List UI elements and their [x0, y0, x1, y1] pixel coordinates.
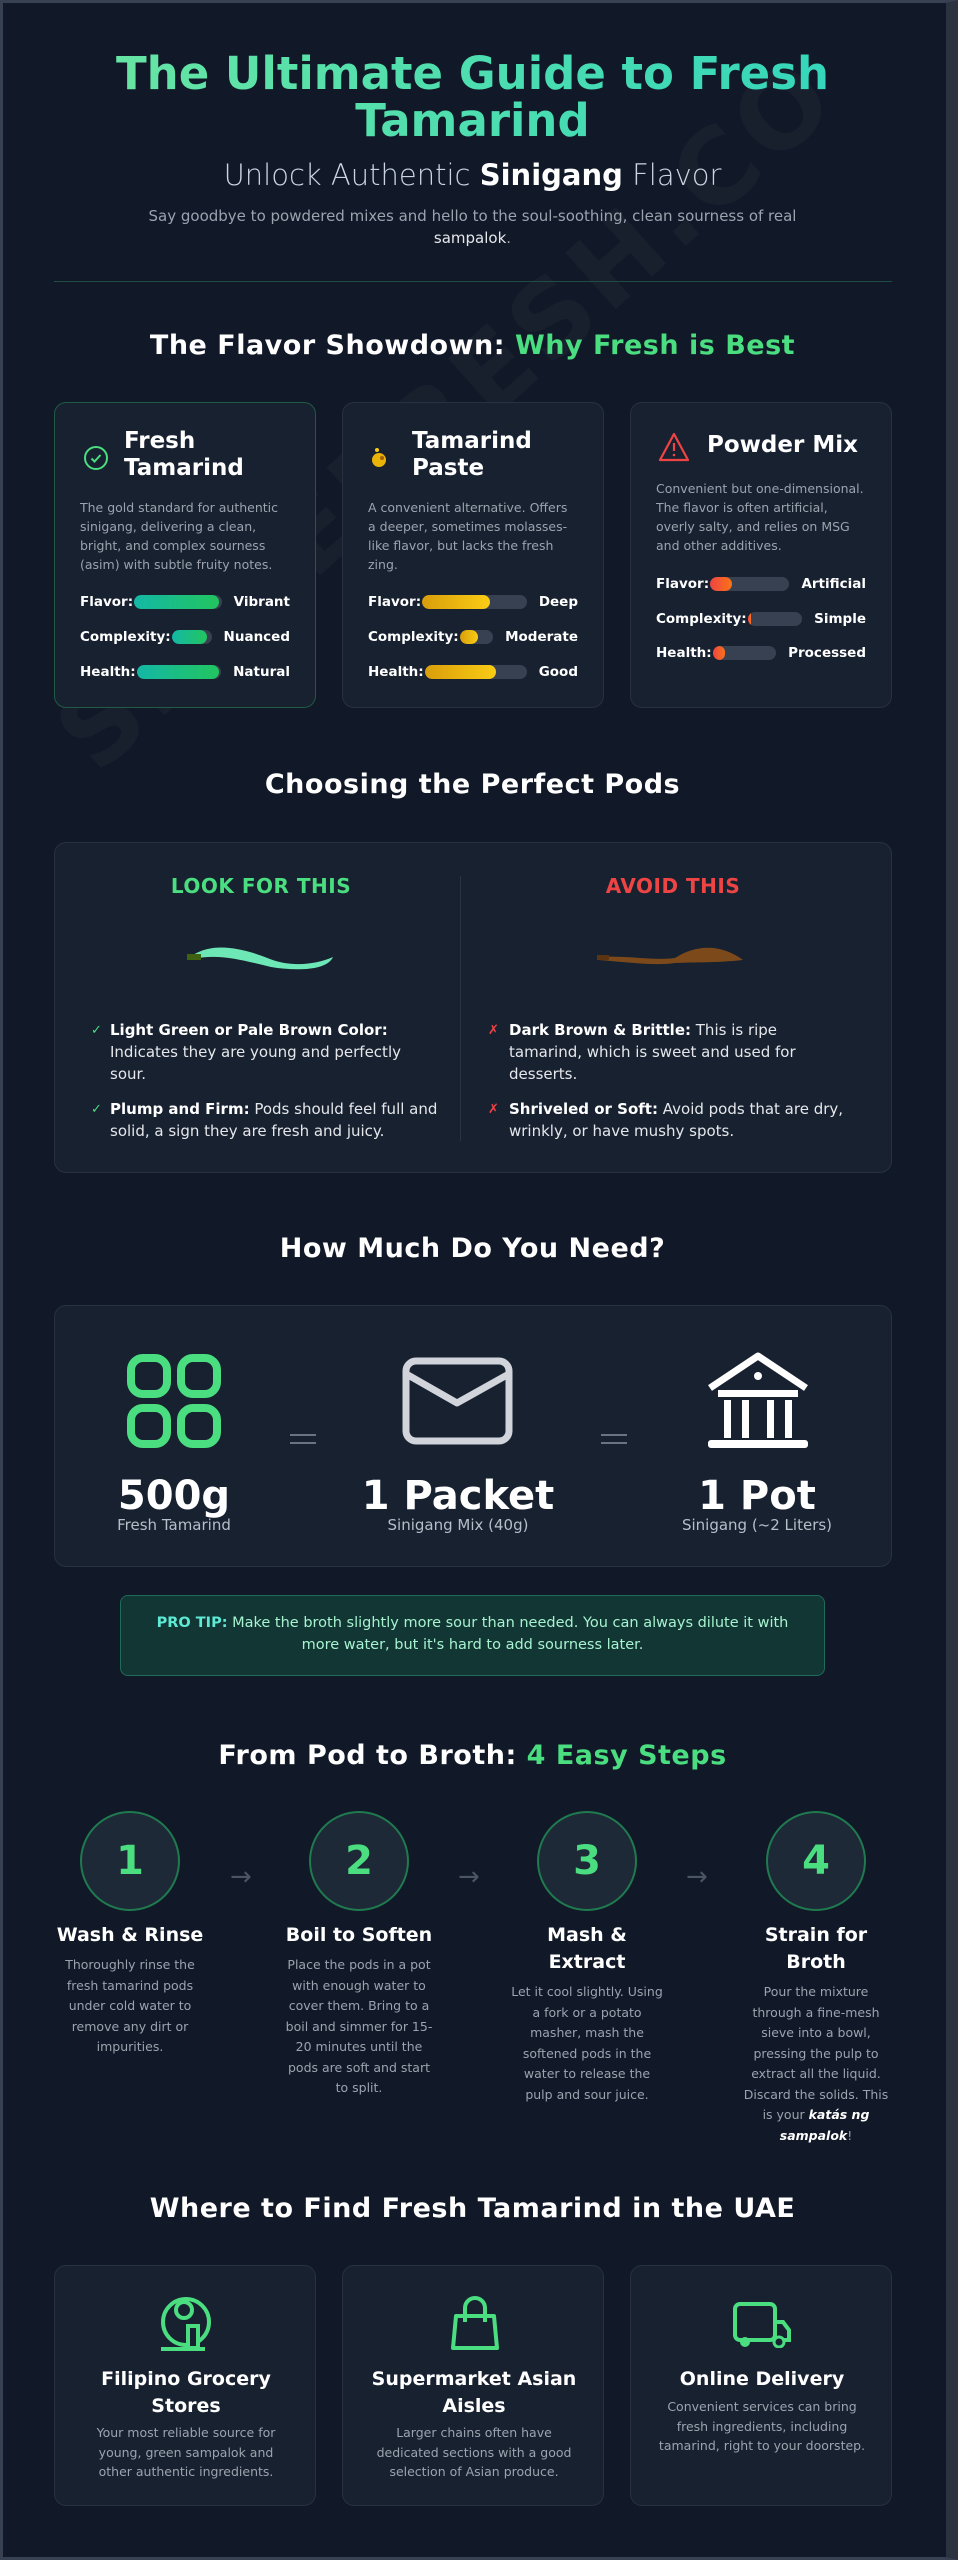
card title	[372, 2368, 576, 2417]
step 4: 4	[802, 1838, 830, 1884]
card: tamarind paste: Health: Good	[368, 664, 578, 680]
callout: pro tip: PRO TIP: Make the broth slightly more sour than needed. You can always dilute it with more water, but it's hard to add sourness later.	[157, 1615, 788, 1653]
panel: pods: Shriveled or Soft: Avoid pods that are dry, wrinkly, or have mushy spots.	[509, 1100, 843, 1140]
card: online delivery	[630, 2265, 892, 2506]
panel: pods: Plump and Firm: Pods should feel full and solid, a sign they are fresh and juicy.	[110, 1100, 437, 1140]
quantity: packet	[362, 1473, 554, 1534]
list: look for	[91, 1021, 437, 1140]
panel: quantities: 500g	[118, 1473, 230, 1519]
icon: bag	[451, 2296, 499, 2350]
card title	[124, 428, 244, 481]
panel: pods: ✓	[91, 1102, 102, 1117]
step 4: Broth	[786, 1951, 846, 1973]
icon: paste	[372, 448, 386, 467]
title	[0, 50, 945, 144]
arrow: →	[458, 1862, 480, 1892]
icon: check circle	[84, 446, 108, 470]
card: powder mix: Health: Processed	[656, 645, 866, 661]
bars: Flavor: Deep	[368, 594, 578, 610]
panel: quantities: Sinigang (~2 Liters)	[682, 1516, 832, 1534]
panel: pods: ✗	[488, 1023, 499, 1038]
icon: green pod	[187, 948, 333, 970]
step 2: 2	[345, 1838, 373, 1884]
panel: pods	[54, 842, 892, 1173]
card: fresh tamarind	[54, 402, 316, 708]
card title: Tamarind	[412, 428, 532, 454]
heading: flavor showdown: The Flavor Showdown: Why Fresh is Best	[150, 330, 795, 361]
arrow: →	[686, 1862, 708, 1892]
card desc: Larger chains often have dedicated sections with a good selection of Asian produce.	[377, 2425, 571, 2479]
panel: pods: Light Green or Pale Brown Color: Indicates they are young and perfectly sour.	[110, 1021, 401, 1083]
tagline: Say goodbye to powdered mixes and hello to the soul-soothing, clean sourness of real sampalok.	[149, 207, 796, 247]
panel: quantities	[54, 1305, 892, 1567]
card desc: The gold standard for authentic sinigang, delivering a clean, bright, and complex sourness (asim) with subtle fruity notes.	[80, 500, 278, 572]
step 3: 3	[573, 1838, 601, 1884]
panel: quantities: 1 Packet	[362, 1473, 554, 1519]
card: tamarind paste: Complexity: Moderate	[368, 629, 578, 645]
panel: pods: ✓	[91, 1023, 102, 1038]
step 2	[286, 1811, 432, 2095]
card: supermarket	[342, 2265, 604, 2506]
step 4: Strain for	[765, 1924, 867, 1946]
step 3	[511, 1811, 663, 2102]
panel: pods: Dark Brown & Brittle: This is ripe tamarind, which is sweet and used for desserts.	[509, 1021, 796, 1083]
heading: steps: From Pod to Broth: 4 Easy Steps	[218, 1740, 727, 1771]
list: avoid	[488, 1021, 843, 1140]
callout: pro tip	[120, 1595, 825, 1676]
subtitle: Unlock Authentic Sinigang Flavor	[224, 158, 721, 192]
icon: warning	[658, 432, 690, 462]
arrow: →	[230, 1862, 252, 1892]
bars: Flavor: Vibrant	[80, 594, 290, 610]
icon: store	[161, 2297, 211, 2351]
card: powder mix: Complexity: Simple	[656, 611, 866, 627]
icon: pot building	[708, 1352, 808, 1448]
step 1: 1	[116, 1838, 144, 1884]
card: fresh tamarind: Complexity: Nuanced	[80, 629, 290, 645]
quantity: 500g	[117, 1473, 231, 1534]
panel: pods: ✗	[488, 1102, 499, 1117]
card title: Tamarind	[124, 455, 244, 481]
card desc: A convenient alternative. Offers a deeper, sometimes molasses-like flavor, but lacks the fresh zing.	[368, 500, 567, 572]
text: Let it cool slightly. Using a fork or a potato masher, mash the softened pods in the water to release the pulp and sour juice.	[511, 1984, 663, 2102]
step 4	[744, 1811, 888, 2142]
heading: how much: How Much Do You Need?	[280, 1233, 665, 1264]
card: fresh tamarind: Health: Natural	[80, 664, 290, 680]
panel: quantities: Fresh Tamarind	[117, 1516, 231, 1534]
card title: Supermarket Asian	[372, 2368, 576, 2390]
card title: Aisles	[442, 2395, 506, 2417]
card desc: Convenient but one-dimensional. The flavor is often artificial, overly salty, and relies on MSG and other additives.	[656, 481, 864, 553]
card: tamarind paste	[342, 402, 604, 708]
card title: Fresh	[124, 428, 195, 454]
icon: brown pod	[597, 948, 743, 964]
title: Tamarind	[355, 94, 590, 147]
heading: avoid this: AVOID THIS	[606, 874, 740, 898]
heading: where to find: Where to Find Fresh Tamarind in the UAE	[150, 2193, 795, 2224]
card: filipino grocery	[54, 2265, 316, 2506]
icon: grid	[127, 1354, 221, 1448]
bars: Flavor: Artificial	[656, 576, 866, 592]
step 3: Extract	[549, 1951, 625, 1973]
card title: Filipino Grocery	[101, 2368, 271, 2390]
step 1: Thoroughly rinse the fresh tamarind pods under cold water to remove any dirt or impurities.	[65, 1957, 195, 2054]
card title: Online Delivery	[680, 2368, 844, 2390]
step 2: Place the pods in a pot with enough water to cover them. Bring to a boil and simmer for 15-20 minutes until the pods are soft and start to split.	[286, 1957, 432, 2095]
card title: Powder Mix	[707, 432, 858, 458]
title: The Ultimate Guide to Fresh	[116, 47, 829, 100]
step 1: Wash & Rinse	[57, 1924, 203, 1946]
equals signs	[290, 1434, 316, 1444]
card title: Paste	[412, 455, 484, 481]
card: powder mix	[630, 402, 892, 708]
heading: look for this: LOOK FOR THIS	[171, 874, 351, 898]
icon: envelope	[402, 1358, 512, 1444]
icon: delivery	[733, 2302, 791, 2348]
step 1	[57, 1811, 203, 2054]
panel: quantities: Sinigang Mix (40g)	[388, 1516, 528, 1534]
text: Pour the mixture through a fine-mesh sieve into a bowl, pressing the pulp to extract all the liquid. Discard the solids. This is your katás ng sampalok!	[744, 1984, 888, 2142]
card desc: Your most reliable source for young, green sampalok and other authentic ingredients.	[97, 2425, 275, 2479]
card desc: Convenient services can bring fresh ingredients, including tamarind, right to your doorstep.	[659, 2399, 865, 2453]
quantity: pot	[682, 1473, 832, 1534]
card title: Stores	[151, 2395, 221, 2417]
card title	[101, 2368, 271, 2417]
card title	[412, 428, 532, 481]
step 2: Boil to Soften	[286, 1924, 432, 1946]
step 3: Mash &	[547, 1924, 627, 1946]
panel: quantities: 1 Pot	[698, 1473, 816, 1519]
heading: choosing pods: Choosing the Perfect Pods	[265, 769, 680, 800]
watermark: SPICEFRESH.CO	[32, 32, 860, 794]
